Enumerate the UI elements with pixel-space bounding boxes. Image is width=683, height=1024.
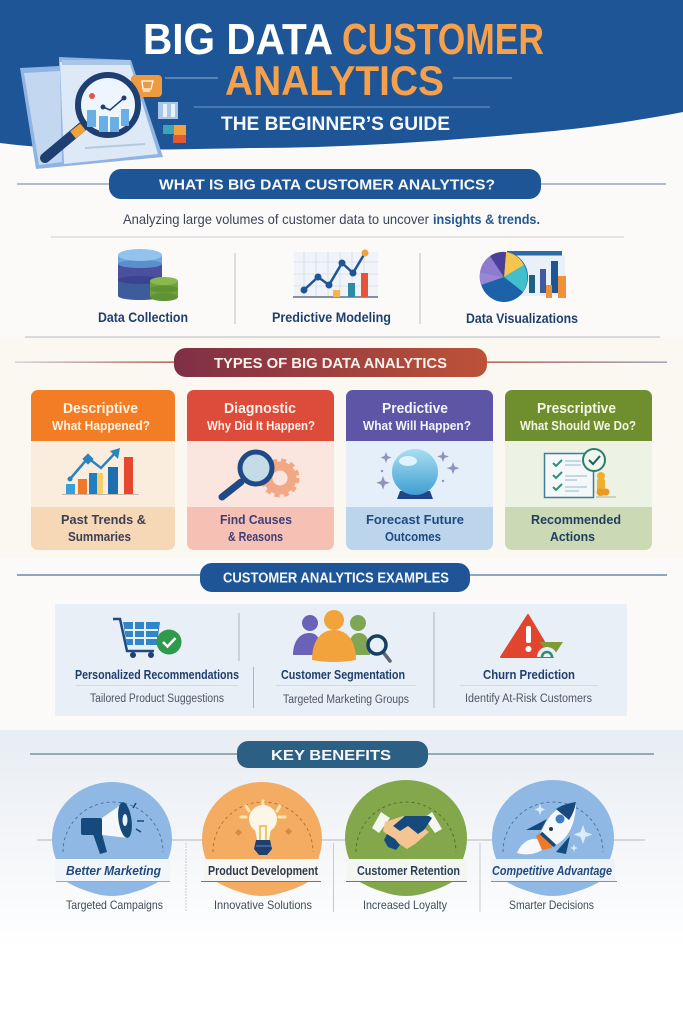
question: diagnostic: Why Did It Happen? [207,419,315,433]
text: forecast [366,512,464,544]
panel: descriptive [31,390,175,550]
text: innovative solutions: Innovative Solutions [214,898,312,912]
text: past trends [61,512,146,544]
heading: predictive: Predictive [382,400,448,417]
label: predictive modeling: Predictive Modeling [272,310,391,325]
text: smarter decisions: Smarter Decisions [509,898,594,912]
subtitle: THE BEGINNER’S GUIDE [221,114,450,135]
benefit: product development [201,782,322,912]
panel: predictive [346,390,493,550]
text: recommended [531,512,621,544]
text: recommended: Actions [550,529,595,544]
section heading: key benefits [30,741,654,768]
text: tailored suggestions: Tailored Product Suggestions [90,693,224,705]
text: find causes [220,512,292,544]
heading: product development: Product Development [208,864,319,878]
text: find causes: Find Causes [220,512,292,527]
heading: diagnostic: Diagnostic [224,400,296,417]
icon: data collection [118,249,178,301]
question: descriptive: What Happened? [52,419,150,433]
panel: diagnostic [187,390,334,550]
text: forecast: Outcomes [385,529,441,544]
text: past trends: Summaries [68,529,131,544]
text: targeted campaigns: Targeted Campaigns [66,898,163,912]
heading: churn prediction: Churn Prediction [483,668,575,682]
text: targeted groups: Targeted Marketing Groups [283,694,409,706]
heading: customer segmentation: Customer Segmentation [281,668,405,682]
icon: checklist [544,449,616,498]
icon: data visualizations [480,251,566,302]
icon: handshake [372,812,442,850]
question: prescriptive: What Should We Do? [520,419,636,433]
section heading: types [15,348,667,377]
heading: competitive advantage: Competitive Advantage [492,864,612,878]
text: find causes: & Reasons [228,529,283,544]
title: CUSTOMER [342,15,544,64]
label: data visualizations: Data Visualizations [466,311,578,326]
benefit: competitive advantage [491,780,617,912]
text: recommended: Recommended [531,512,621,527]
text: forecast: Forecast Future [366,512,464,527]
section heading: examples: CUSTOMER ANALYTICS EXAMPLES [223,570,449,586]
icon: shopping cart with check [113,619,182,658]
title [143,15,544,107]
section heading: what is [17,169,666,199]
panel: prescriptive [505,390,652,550]
section heading: what is: WHAT IS BIG DATA CUSTOMER ANALYTICS? [159,176,495,194]
benefit: better marketing [52,782,172,912]
text: past trends: Past Trends & [61,512,146,527]
title: BIG DATA [143,15,333,64]
section heading: key benefits: KEY BENEFITS [271,747,391,764]
intro text: Analyzing large volumes of customer data to uncover [123,211,429,227]
heading: personalized recommendations: Personalized Recommendations [75,668,239,682]
icon: customer group [293,610,390,662]
label: data collection: Data Collection [98,310,188,325]
icon: crystal ball [376,449,460,499]
icon: churn warning [501,615,563,657]
section heading: examples [17,563,667,592]
heading: prescriptive: Prescriptive [537,400,616,417]
section heading: types: TYPES OF BIG DATA ANALYTICS [214,355,447,372]
icon: predictive modeling chart [293,250,378,297]
heading: descriptive: Descriptive [63,400,138,417]
icon: light bulb [235,801,292,855]
icon: rocket [517,802,592,854]
icon: magnifier and gear [222,452,297,497]
icon: analytics dashboard with magnifier [20,57,186,169]
text: at-risk customers: Identify At-Risk Customers [465,693,592,705]
icon: megaphone [81,801,144,854]
icon: rising bar chart [62,448,139,494]
heading: better marketing: Better Marketing [66,864,161,878]
heading: customer retention: Customer Retention [357,864,460,878]
title: ANALYTICS [225,57,444,104]
question: predictive: What Will Happen? [363,419,471,433]
benefit: customer retention [345,780,467,912]
text: increased loyalty: Increased Loyalty [363,898,447,912]
header banner [0,0,683,150]
panel: examples [55,604,627,716]
intro text: insights & trends. [433,211,540,227]
